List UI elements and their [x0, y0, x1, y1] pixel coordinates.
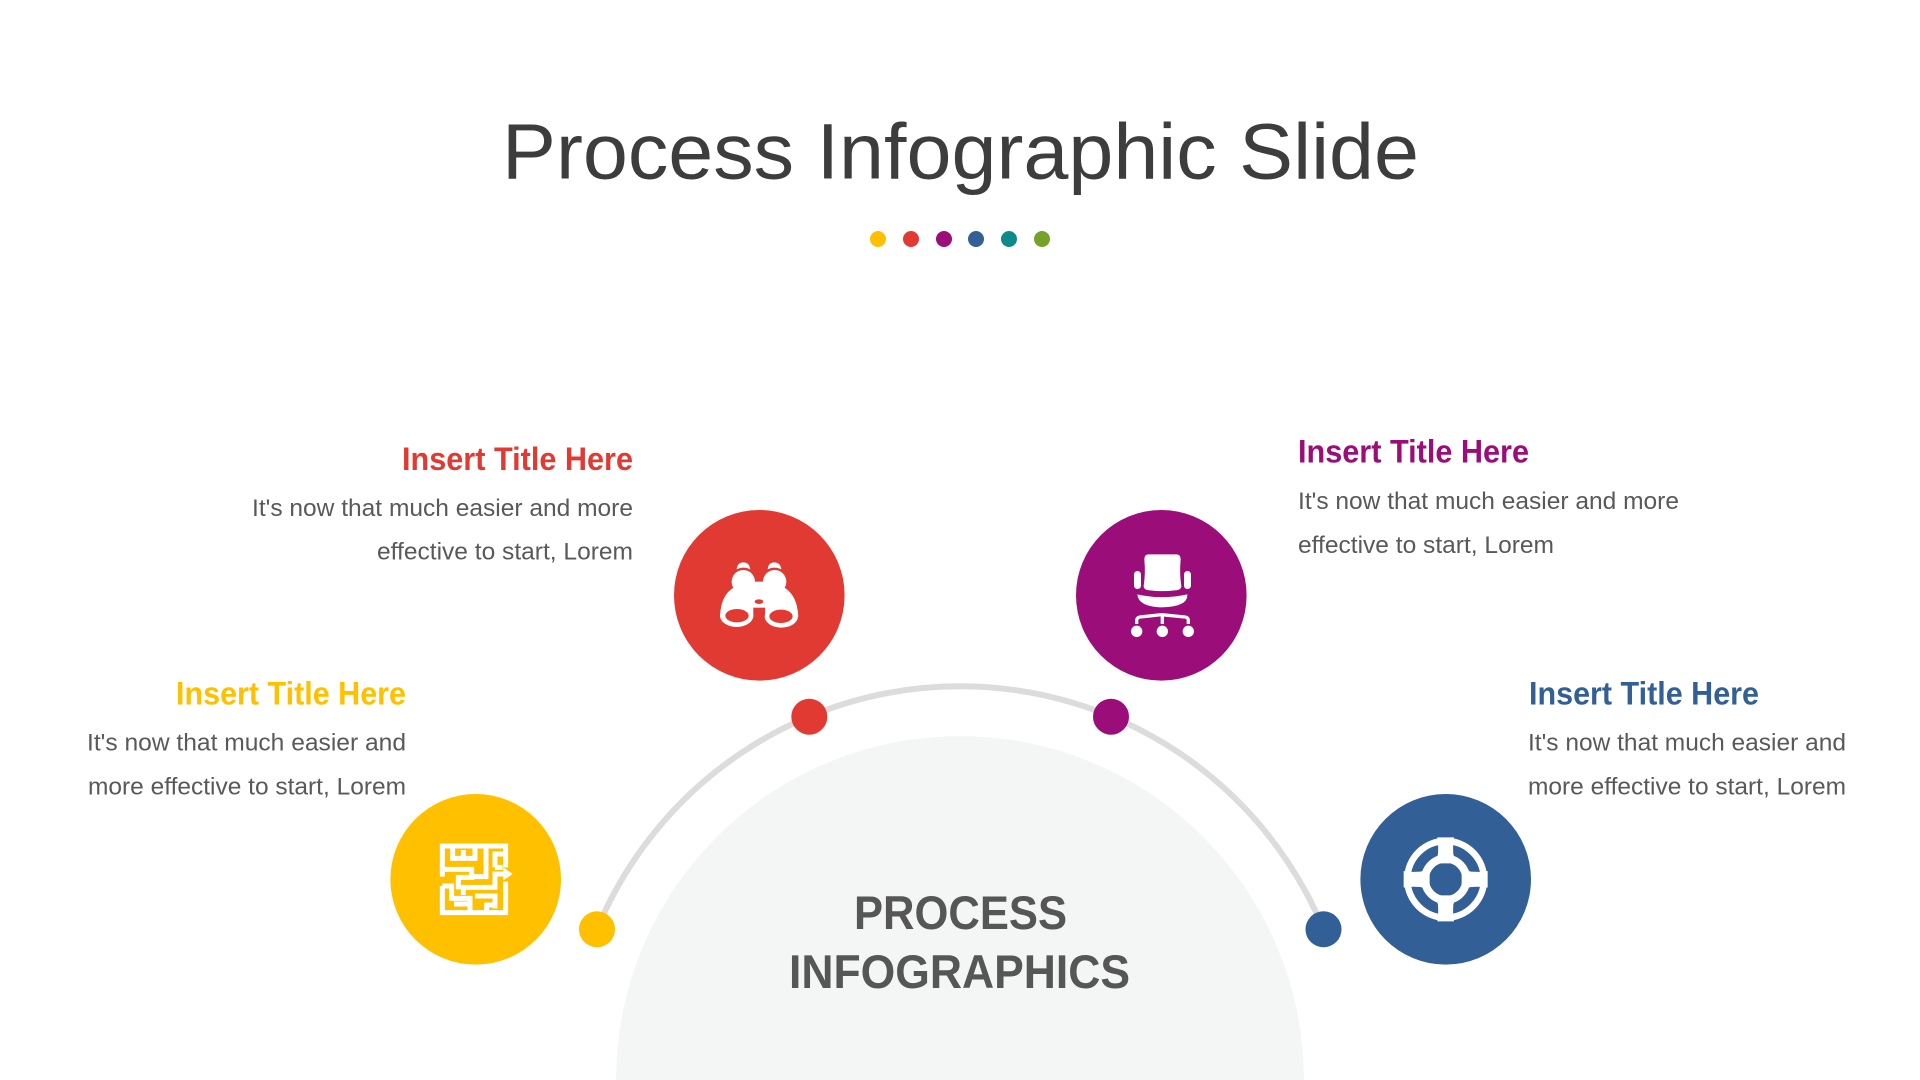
step 2: red [252, 441, 845, 735]
icon: maze [442, 846, 513, 913]
step 3: purple [1076, 433, 1679, 735]
title: Process Infographic Slide [502, 106, 1419, 196]
body text: yellow: It's now that much easier and [87, 730, 406, 757]
heading: red: Insert Title Here [402, 441, 633, 477]
step 1: yellow [87, 676, 615, 965]
body text: purple [1298, 488, 1679, 559]
heading: yellow: Insert Title Here [176, 676, 406, 712]
node: blue [1306, 911, 1342, 947]
body text: yellow: more effective to start, Lorem [88, 774, 406, 801]
heading: blue: Insert Title Here [1529, 676, 1759, 712]
central label [789, 886, 1130, 998]
icon circle: red [674, 510, 845, 681]
central label: PROCESS [854, 886, 1067, 939]
body text: purple: It's now that much easier and more [1298, 488, 1679, 515]
icon circle: blue [1360, 794, 1531, 965]
body text: yellow [87, 730, 406, 801]
step 4: blue [1306, 676, 1846, 965]
body text: blue: more effective to start, Lorem [1528, 774, 1846, 801]
icon: office chair [1131, 554, 1194, 637]
icon: lifebuoy [1404, 837, 1488, 921]
body text: blue [1528, 730, 1846, 801]
node: red [791, 699, 827, 735]
node: purple [1093, 699, 1129, 735]
body text: purple: effective to start, Lorem [1298, 532, 1554, 559]
icon: binoculars [720, 562, 798, 628]
decorative colour dots [870, 231, 1050, 247]
central label: INFOGRAPHICS [789, 945, 1130, 998]
body text: blue: It's now that much easier and [1528, 730, 1846, 757]
body text: red [252, 495, 633, 565]
icon circle: purple [1076, 510, 1247, 681]
gray connecting arc [597, 686, 1324, 929]
body text: red: effective to start, Lorem [377, 538, 633, 565]
heading: purple: Insert Title Here [1298, 433, 1529, 469]
central semicircle panel [616, 736, 1304, 1080]
body text: red: It's now that much easier and more [252, 495, 633, 522]
node: yellow [579, 911, 615, 947]
icon circle: yellow [390, 794, 561, 965]
